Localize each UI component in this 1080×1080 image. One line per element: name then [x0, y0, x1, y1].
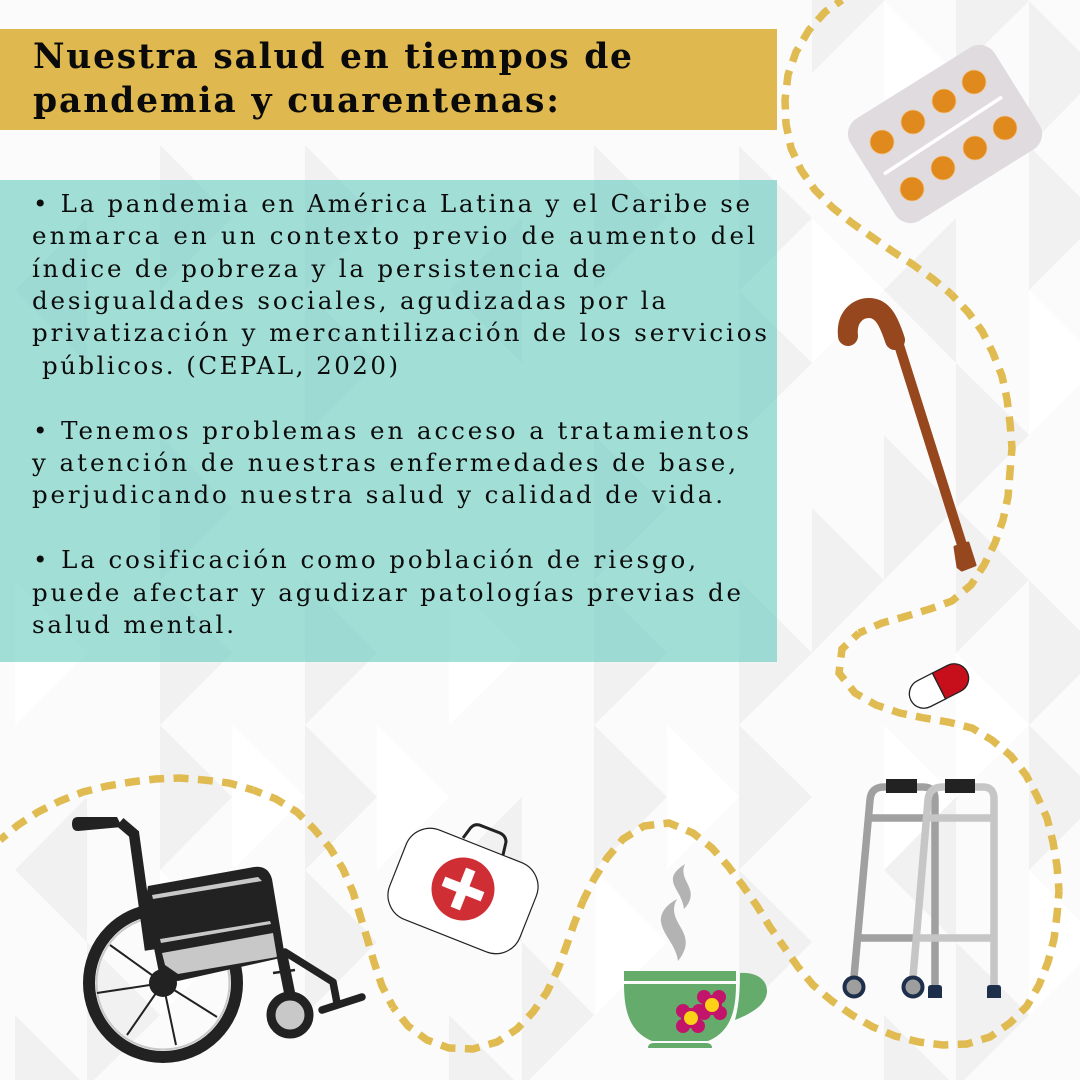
paragraph 3: puede afectar y agudizar patologías previas de — [32, 578, 741, 607]
paragraph 3: salud mental. — [32, 610, 234, 639]
icon: teacup — [624, 864, 767, 1048]
paragraph 1 — [32, 189, 767, 380]
icon: capsule — [904, 659, 974, 713]
front frame — [913, 787, 994, 990]
paragraph 2: • Tenemos problemas en acceso a tratamientos — [33, 416, 749, 445]
title banner — [0, 29, 777, 130]
title: pandemia y cuarentenas: — [33, 81, 559, 121]
icon: blister pack — [841, 38, 1049, 230]
title — [33, 37, 632, 121]
paragraph 3: • La cosificación como población de riesgo, — [33, 545, 696, 574]
back frame — [854, 787, 935, 990]
icon: walker — [844, 779, 1001, 998]
grips — [886, 779, 975, 793]
flowers — [676, 990, 727, 1033]
frame — [120, 822, 150, 950]
paragraph 1: • La pandemia en América Latina y el Caribe se — [33, 189, 750, 218]
paragraph 3 — [32, 545, 741, 639]
paragraph 2: y atención de nuestras enfermedades de base, — [31, 448, 736, 477]
paragraph 1: privatización y mercantilización de los servicios — [32, 318, 767, 347]
rear wheel — [89, 909, 237, 1057]
wheels and feet — [844, 978, 1001, 998]
paragraph 2: perjudicando nuestra salud y calidad de vida. — [32, 480, 723, 509]
footrest — [285, 952, 362, 1010]
paragraph 1: desigualdades sociales, agudizadas por la — [32, 286, 666, 315]
paragraph 1: enmarca en un contexto previo de aumento del — [32, 221, 755, 250]
caster — [282, 955, 290, 995]
panel: text — [0, 180, 777, 662]
paragraph 2 — [31, 416, 749, 509]
icon: wheelchair — [72, 817, 362, 1057]
title: Nuestra salud en tiempos de — [33, 37, 632, 77]
seat — [145, 867, 285, 981]
cup — [624, 971, 767, 1048]
steam — [661, 864, 691, 961]
icon: walking cane — [848, 308, 975, 570]
paragraph 1: índice de pobreza y la persistencia de — [32, 254, 606, 283]
icon: first aid kit — [380, 821, 546, 961]
paragraph 1: públicos. (CEPAL, 2020) — [42, 351, 398, 380]
